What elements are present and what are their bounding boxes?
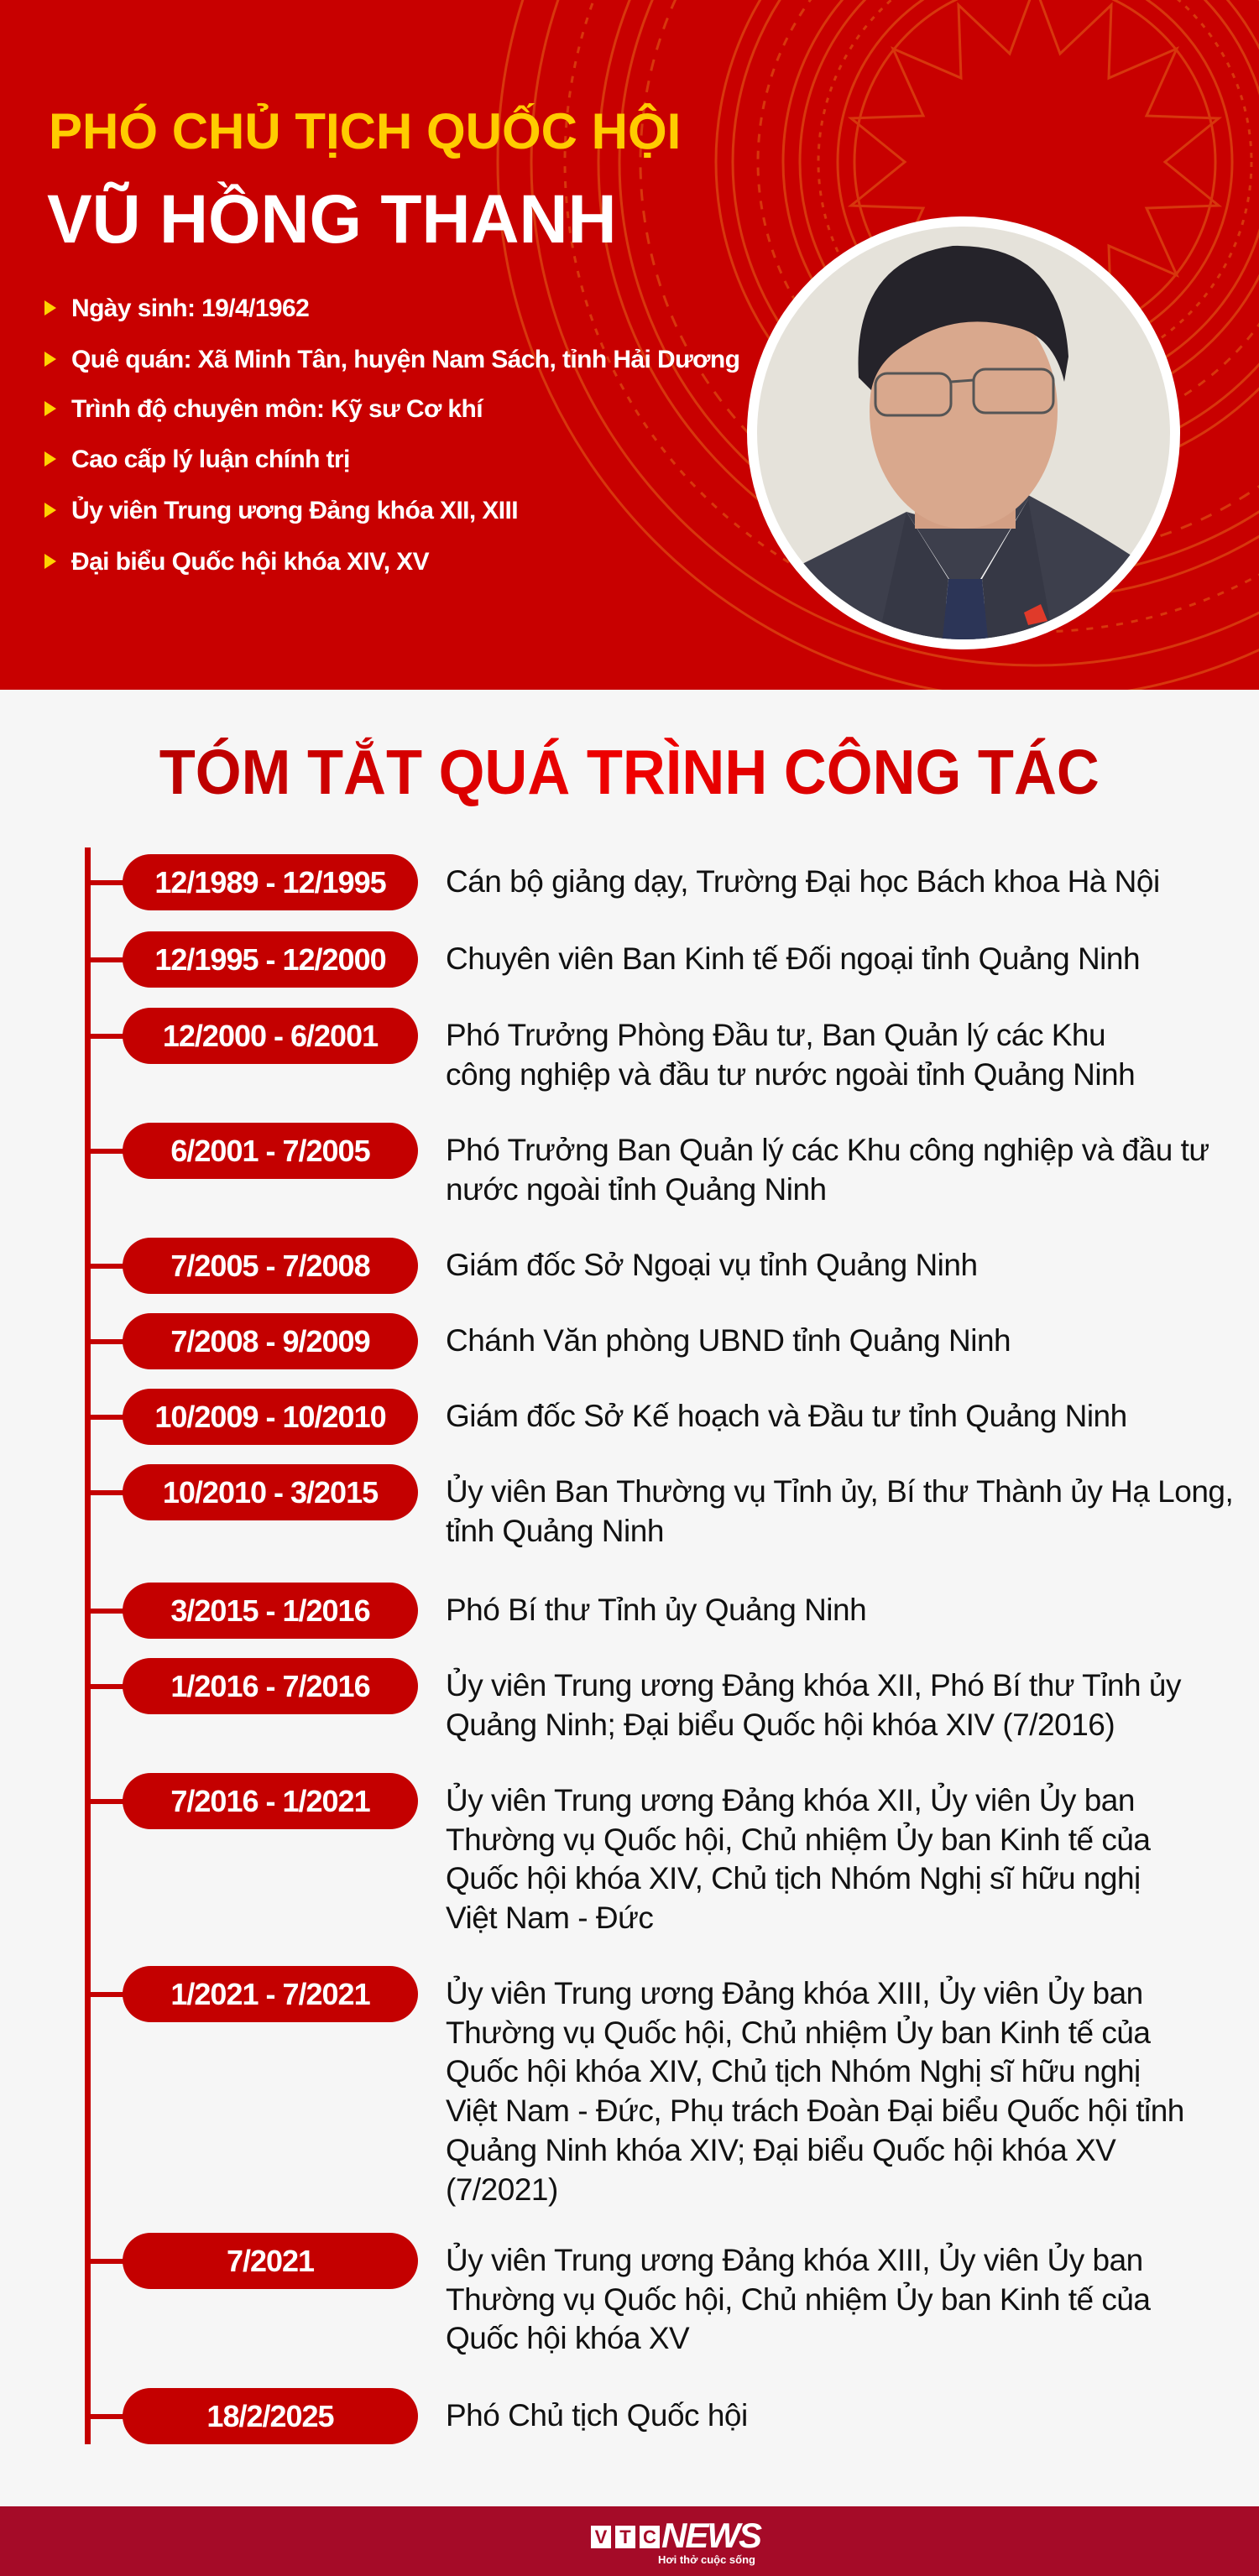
bullet list xyxy=(44,295,739,576)
entry 3: Phó Trưởng Phòng Đầu tư, Ban Quản lý các Khu xyxy=(446,1018,1105,1052)
title: role: PHÓ CHỦ TỊCH QUỐC HỘI xyxy=(49,103,681,159)
entry 12: (7/2021) xyxy=(446,2172,558,2207)
bullet: politics: Cao cấp lý luận chính trị xyxy=(71,446,350,473)
entry 11: 7/2016 - 1/2021 xyxy=(170,1784,370,1818)
entry 14 xyxy=(91,2388,748,2444)
entry 4 xyxy=(91,1123,1209,1207)
entry 2: Chuyên viên Ban Kinh tế Đối ngoại tỉnh Quảng Ninh xyxy=(446,941,1140,976)
entry 5 xyxy=(91,1238,978,1294)
entry 6: Chánh Văn phòng UBND tỉnh Quảng Ninh xyxy=(446,1323,1011,1358)
entry 7: 10/2009 - 10/2010 xyxy=(154,1400,386,1434)
entry 11: Quốc hội khóa XIV, Chủ tịch Nhóm Nghị sĩ hữu nghị xyxy=(446,1861,1141,1895)
entry 7 xyxy=(91,1389,1127,1445)
timeline xyxy=(85,847,91,2444)
entry 1: 12/1989 - 12/1995 xyxy=(154,865,386,900)
entry 1 xyxy=(91,854,1160,910)
entry 4: Phó Trưởng Ban Quản lý các Khu công nghiệp và đầu tư xyxy=(446,1133,1209,1167)
entry 10: Quảng Ninh; Đại biểu Quốc hội khóa XIV (7/2016) xyxy=(446,1708,1115,1742)
entry 6 xyxy=(91,1313,1011,1369)
bullet: birth: Ngày sinh: 19/4/1962 xyxy=(71,295,309,322)
entry 12: Ủy viên Trung ương Đảng khóa XIII, Ủy viên Ủy ban xyxy=(446,1976,1143,2010)
entry 2: 12/1995 - 12/2000 xyxy=(154,942,386,977)
bullet: deputy: Đại biểu Quốc hội khóa XIV, XV xyxy=(71,548,429,576)
footer xyxy=(0,2506,1259,2576)
entry 3: 12/2000 - 6/2001 xyxy=(163,1019,378,1053)
entry 12: Quốc hội khóa XIV, Chủ tịch Nhóm Nghị sĩ hữu nghị xyxy=(446,2054,1141,2088)
logo VTC NEWS: Hơi thở cuộc sống xyxy=(658,2553,755,2566)
logo VTC NEWS xyxy=(591,2516,762,2566)
portrait photo xyxy=(747,216,1180,649)
entry 5: 7/2005 - 7/2008 xyxy=(170,1249,370,1283)
entry 9 xyxy=(91,1583,866,1639)
entry 12: Quảng Ninh khóa XIV; Đại biểu Quốc hội khóa XV xyxy=(446,2133,1115,2167)
entry 13: 7/2021 xyxy=(227,2244,314,2278)
entry 11: Việt Nam - Đức xyxy=(446,1901,653,1935)
entry 12 xyxy=(91,1966,1184,2207)
timeline vertical line xyxy=(85,847,91,2444)
entry 9: Phó Bí thư Tỉnh ủy Quảng Ninh xyxy=(446,1593,866,1627)
entry 12: 1/2021 - 7/2021 xyxy=(170,1977,370,2011)
entry 8: Ủy viên Ban Thường vụ Tỉnh ủy, Bí thư Thành ủy Hạ Long, xyxy=(446,1474,1233,1509)
entry 7: Giám đốc Sở Kế hoạch và Đầu tư tỉnh Quảng Ninh xyxy=(446,1399,1127,1433)
bullet: hometown: Quê quán: Xã Minh Tân, huyện Nam Sách, tỉnh Hải Dương xyxy=(71,346,739,373)
logo VTC NEWS: NEWS xyxy=(661,2516,760,2555)
logo VTC NEWS: C xyxy=(643,2526,656,2547)
entry 5: Giám đốc Sở Ngoại vụ tỉnh Quảng Ninh xyxy=(446,1248,978,1282)
entry 2 xyxy=(91,931,1140,988)
entry 3 xyxy=(91,1008,1135,1092)
logo VTC NEWS: V xyxy=(595,2526,607,2547)
header panel xyxy=(0,0,1259,690)
entry 8: 10/2010 - 3/2015 xyxy=(163,1475,378,1510)
drum pattern background xyxy=(497,0,1259,690)
entry 10: Ủy viên Trung ương Đảng khóa XII, Phó Bí thư Tỉnh ủy xyxy=(446,1668,1181,1703)
entry 11: Ủy viên Trung ương Đảng khóa XII, Ủy viên Ủy ban xyxy=(446,1783,1135,1817)
entry 8 xyxy=(91,1464,1233,1548)
entry 1: Cán bộ giảng dạy, Trường Đại học Bách khoa Hà Nội xyxy=(446,864,1160,899)
bullet: central committee: Ủy viên Trung ương Đảng khóa XII, XIII xyxy=(71,497,518,524)
entry 11 xyxy=(91,1773,1151,1935)
entry 6: 7/2008 - 9/2009 xyxy=(170,1324,370,1358)
entry 14: 18/2/2025 xyxy=(206,2399,334,2433)
entry 9: 3/2015 - 1/2016 xyxy=(170,1593,370,1628)
entry 13: Thường vụ Quốc hội, Chủ nhiệm Ủy ban Kinh tế của xyxy=(446,2282,1151,2317)
entry 8: tỉnh Quảng Ninh xyxy=(446,1514,664,1548)
entry 13: Quốc hội khóa XV xyxy=(446,2321,689,2355)
entry 14: Phó Chủ tịch Quốc hội xyxy=(446,2398,748,2433)
entry 12: Thường vụ Quốc hội, Chủ nhiệm Ủy ban Kinh tế của xyxy=(446,2015,1151,2050)
entry 4: 6/2001 - 7/2005 xyxy=(170,1134,370,1168)
entry 12: Việt Nam - Đức, Phụ trách Đoàn Đại biểu Quốc hội tỉnh xyxy=(446,2094,1184,2128)
bullet: education: Trình độ chuyên môn: Kỹ sư Cơ khí xyxy=(71,395,483,423)
entry 13 xyxy=(91,2233,1151,2355)
entry 4: nước ngoài tỉnh Quảng Ninh xyxy=(446,1172,827,1207)
entry 10: 1/2016 - 7/2016 xyxy=(170,1669,370,1703)
logo VTC NEWS: T xyxy=(619,2526,631,2547)
entry 13: Ủy viên Trung ương Đảng khóa XIII, Ủy viên Ủy ban xyxy=(446,2243,1143,2277)
entry 10 xyxy=(91,1658,1182,1742)
entry 3: công nghiệp và đầu tư nước ngoài tỉnh Quảng Ninh xyxy=(446,1057,1135,1092)
title: name: VŨ HỒNG THANH xyxy=(47,181,617,258)
section title: TÓM TẮT QUÁ TRÌNH CÔNG TÁC xyxy=(159,737,1100,807)
entry 11: Thường vụ Quốc hội, Chủ nhiệm Ủy ban Kinh tế của xyxy=(446,1822,1151,1857)
